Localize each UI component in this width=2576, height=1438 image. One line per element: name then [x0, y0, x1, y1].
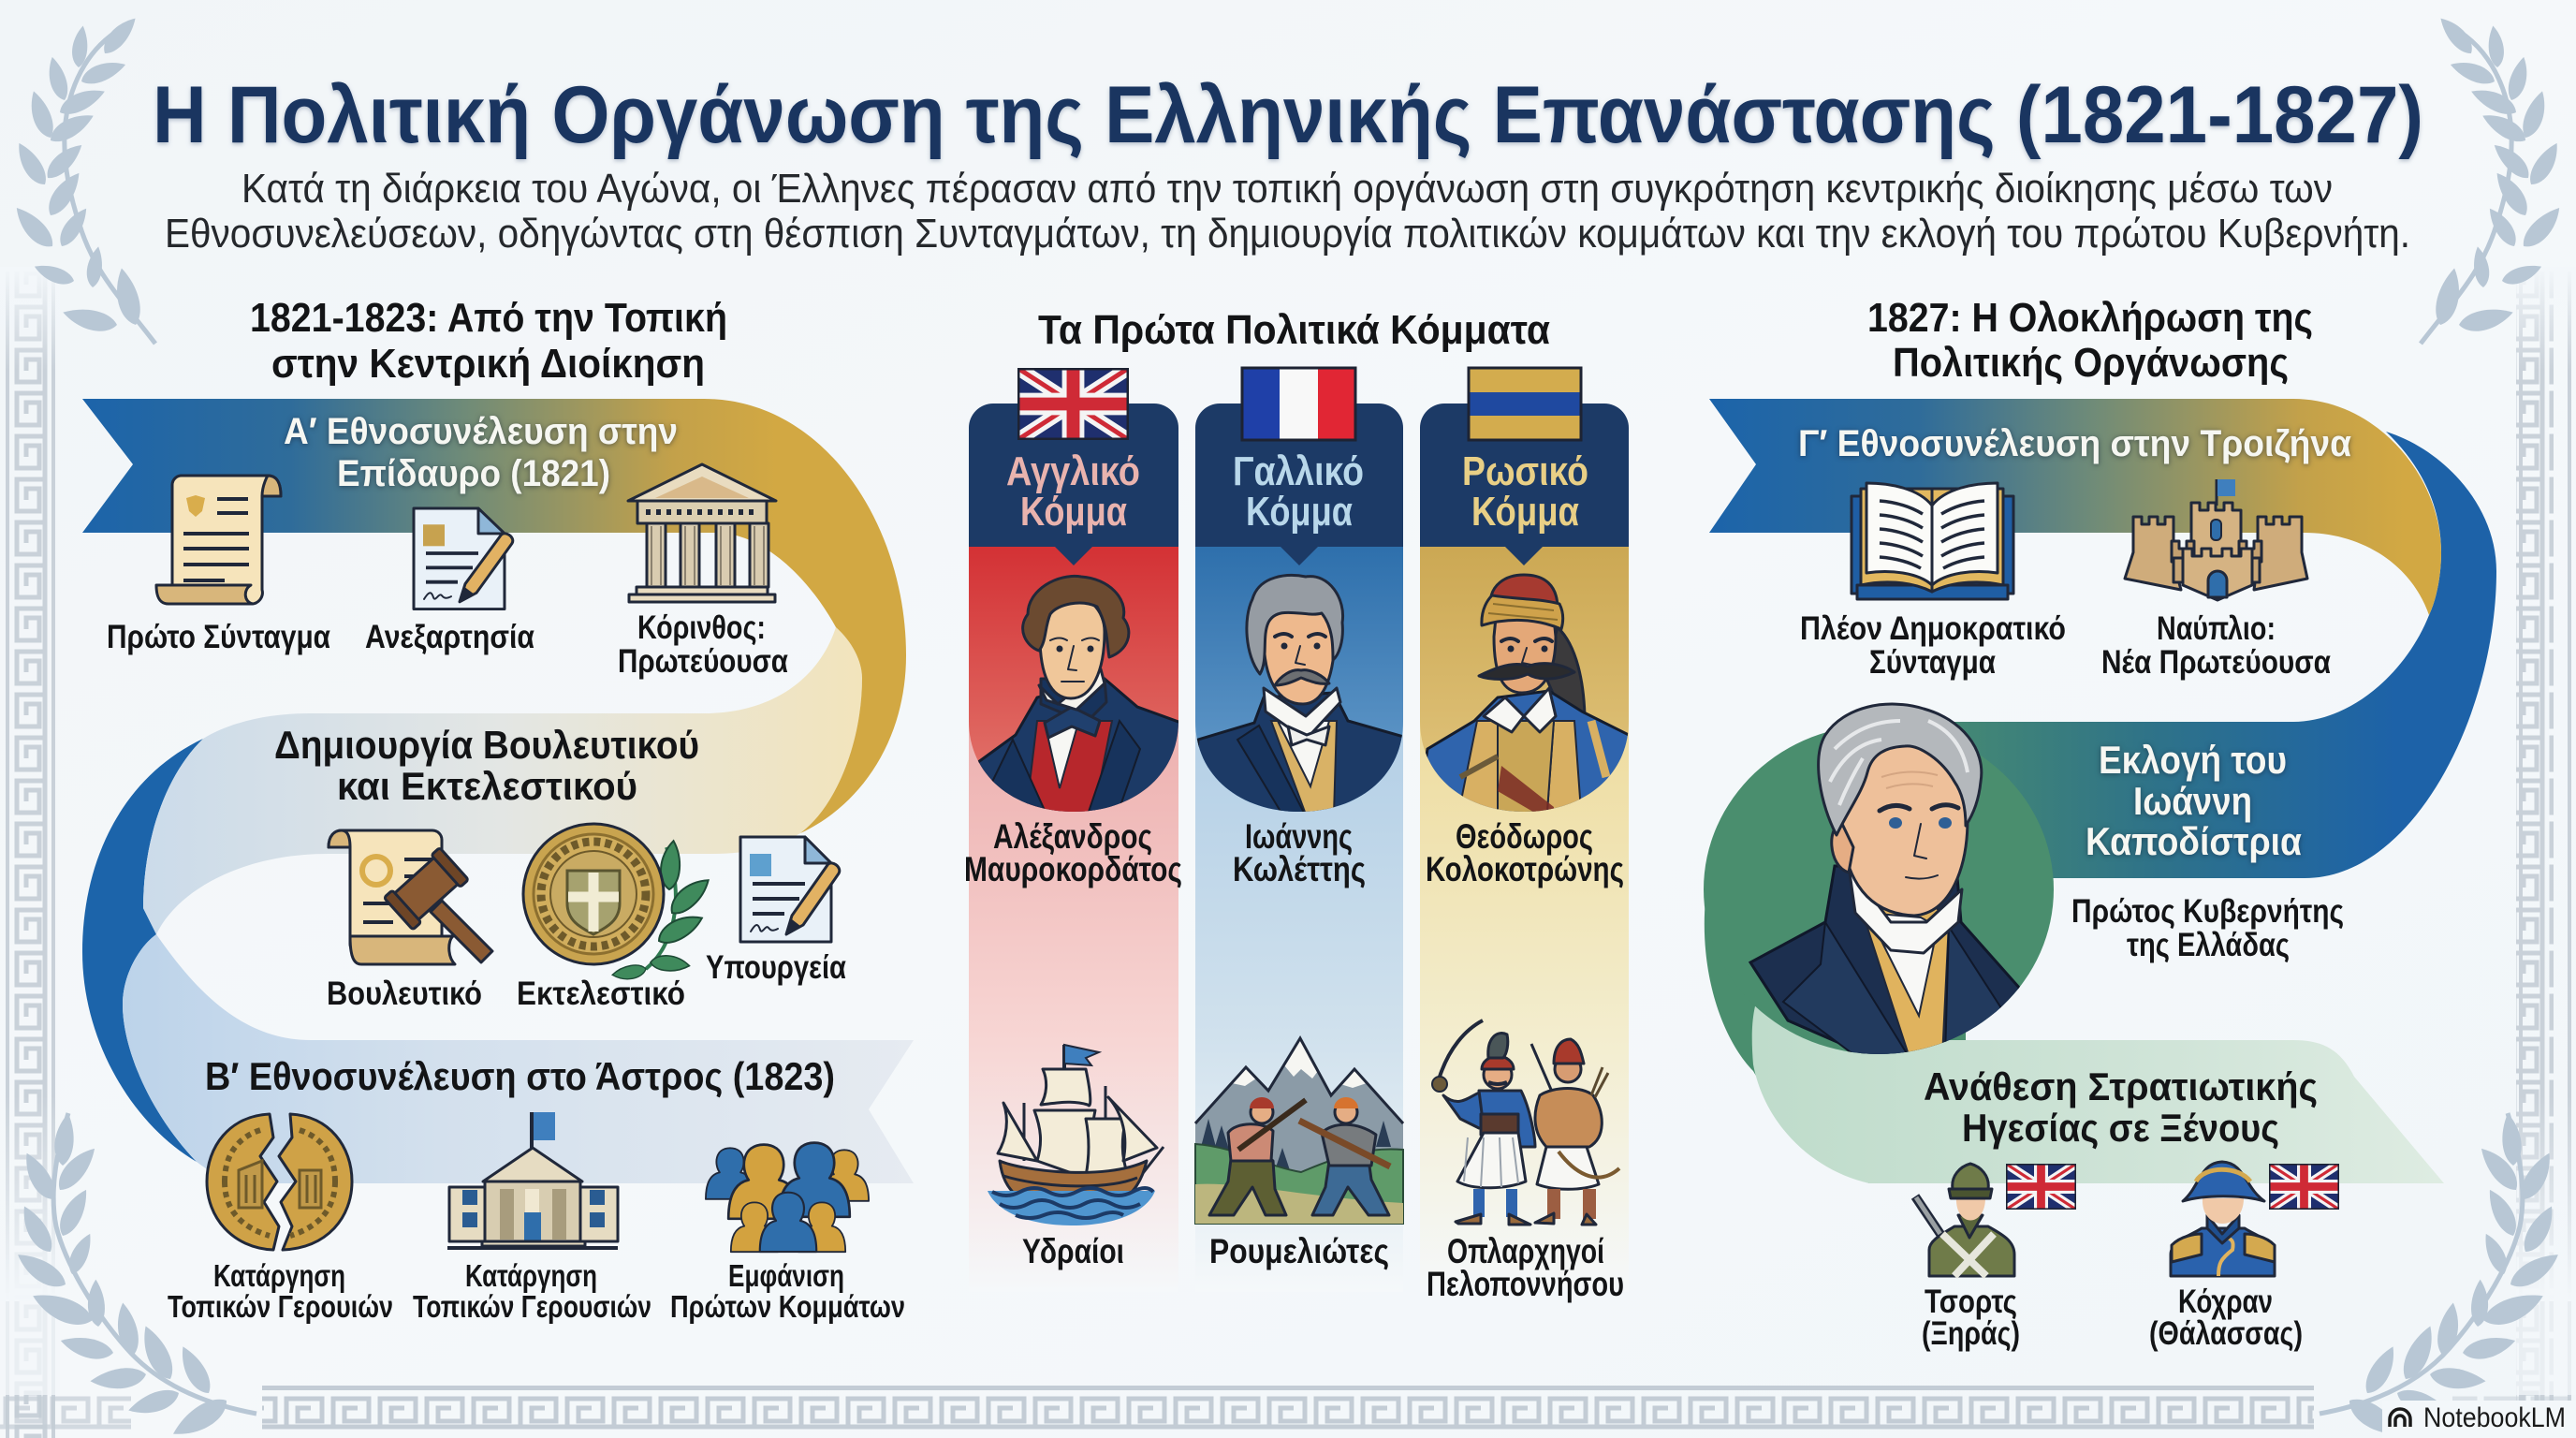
label: election of Kapodistrias: Ιωάννη [2133, 779, 2252, 823]
ribbon text: first assembly: Επίδαυρο (1821) [337, 453, 610, 494]
person name: Κολοκοτρώνης [1426, 850, 1624, 888]
person name [964, 817, 1182, 888]
laurel: bottom left [12, 1112, 256, 1438]
party name: Ρωσικό [1462, 448, 1588, 494]
heading: legislative and executive: Δημιουργία Βουλευτικού [274, 723, 699, 767]
column: French party [1189, 368, 1413, 1292]
heading: 1827: 1827: Η Ολοκλήρωση της [1867, 295, 2313, 341]
label: election of Kapodistrias [2086, 738, 2302, 863]
column: Russian party [1413, 368, 1638, 1303]
heading: 1821-1823: στην Κεντρική Διοίκηση [271, 341, 705, 387]
label: legislative: Βουλευτικό [327, 976, 482, 1012]
portrait: Kolokotronis [1425, 573, 1629, 812]
ribbon: pale band 3 [123, 934, 914, 1183]
icon: broken coin [207, 1114, 352, 1250]
panel: 1827 right timeline [1704, 295, 2496, 1352]
icon: open book [1852, 483, 2013, 599]
label: Corinth capital [618, 609, 788, 680]
ribbon: third assembly [1709, 399, 2441, 615]
label: abolition 2 [413, 1258, 651, 1324]
label: first constitution: Πρώτο Σύνταγμα [107, 619, 330, 655]
party name: Αγγλικό [1006, 448, 1140, 494]
label: democratic constitution [1800, 610, 2066, 681]
party name: Κόμμα [1020, 489, 1127, 535]
label: election of Kapodistrias: Καποδίστρια [2086, 819, 2302, 863]
label: Corinth capital: Πρωτεύουσα [618, 643, 788, 680]
label: Church: (Ξηράς) [1922, 1315, 2020, 1352]
person name: Κωλέττης [1233, 850, 1366, 888]
party name: Κόμμα [1246, 489, 1353, 535]
icon: Nafplio castle [2125, 479, 2307, 600]
icon: signed document [414, 508, 513, 609]
label: first parties: Πρώτων Κομμάτων [670, 1289, 905, 1324]
label: abolition 2: Κατάργηση [465, 1258, 597, 1293]
portrait: Kolettis [1196, 573, 1402, 812]
intro text [165, 166, 2410, 257]
label: Cochrane [2149, 1284, 2303, 1352]
label: Cochrane: Κόχραν [2178, 1284, 2273, 1320]
party name [1006, 448, 1140, 535]
panel: first political parties [964, 307, 1638, 1303]
intro text: Κατά τη διάρκεια του Αγώνα, οι Έλληνες πέρασαν από την τοπική οργάνωση στη συγκρότηση κεντρικής διοίκησης μέσω των [242, 166, 2333, 212]
laurel: top right [2421, 12, 2567, 344]
label: abolition 2: Τοπικών Γερουσιών [413, 1289, 651, 1324]
ribbon text: first assembly [284, 411, 678, 494]
heading: military leadership: Ανάθεση Στρατιωτικής [1924, 1064, 2318, 1108]
icon: scroll and gavel [329, 830, 492, 964]
label: abolition 1: Τοπικών Γερουιών [168, 1289, 393, 1324]
label: independence: Ανεξαρτησία [365, 619, 534, 655]
heading: military leadership: Ηγεσίας σε Ξένους [1962, 1106, 2279, 1150]
icon: government building [447, 1112, 618, 1250]
laurel: top left [9, 12, 155, 344]
label: ministries: Υπουργεία [706, 949, 846, 986]
label: election of Kapodistrias: Εκλογή του [2099, 738, 2287, 782]
ribbon: blue-green band [1919, 432, 2496, 878]
label: Peloponnese chieftains: Πελοποννήσου [1427, 1265, 1624, 1303]
icon: soldier Church [1915, 1164, 2014, 1276]
flag: UK [1017, 368, 1129, 440]
icon: Peloponnese chieftains [1432, 1020, 1619, 1225]
label: Church: Τσορτς [1925, 1284, 2017, 1320]
person name: Μαυροκορδάτος [964, 850, 1182, 888]
heading: legislative and executive: και Εκτελεστικού [337, 764, 637, 808]
party name [1462, 448, 1588, 535]
icon: mountains and fighters [1195, 1038, 1403, 1224]
green crescent [1705, 843, 1966, 1183]
ribbon: pale band 2 [143, 627, 862, 934]
heading: 1821-1823 [250, 295, 727, 387]
label: Cochrane: (Θάλασσας) [2149, 1315, 2303, 1352]
label: Nafplio capital: Ναύπλιο: [2157, 610, 2276, 647]
icon: executive seal [523, 824, 714, 982]
label: first parties: Εμφάνιση [728, 1258, 844, 1293]
label: Church [1922, 1284, 2020, 1352]
label: first parties [670, 1258, 905, 1324]
label: Nafplio capital: Νέα Πρωτεύουσα [2101, 644, 2331, 681]
person name: Αλέξανδρος [993, 817, 1152, 856]
title: Η Πολιτική Οργάνωση της Ελληνικής Επανάστασης (1821-1827) [153, 70, 2423, 160]
person name [1233, 817, 1366, 888]
ribbon: pale green leadership [1752, 988, 2444, 1183]
flag: UK (Cochrane) [2269, 1164, 2339, 1210]
heading: 1827: Πολιτικής Οργάνωσης [1893, 340, 2289, 386]
label: democratic constitution: Σύνταγμα [1869, 644, 1996, 681]
heading: second assembly: Β′ Εθνοσυνέλευση στο Άστρος (1823) [205, 1054, 835, 1098]
portrait: Kapodistrias [1704, 704, 2059, 1058]
person name: Θεόδωρος [1456, 817, 1593, 856]
flag: UK (Church) [2006, 1164, 2076, 1210]
panel: 1821-1823 left timeline [82, 295, 914, 1324]
party name: Γαλλικό [1233, 448, 1364, 494]
heading: parties: Τα Πρώτα Πολιτικά Κόμματα [1038, 307, 1550, 353]
label: abolition 1 [168, 1258, 393, 1324]
ribbon: first assembly [82, 399, 906, 833]
person name: Ιωάννης [1245, 817, 1353, 856]
icon: scroll constitution [156, 476, 281, 604]
label: Peloponnese chieftains [1427, 1232, 1624, 1303]
label: executive: Εκτελεστικό [517, 976, 685, 1012]
icon: ministries document [740, 837, 840, 942]
portrait: Mavrokordatos [977, 575, 1178, 812]
intro text: Εθνοσυνελεύσεων, οδηγώντας στη θέσπιση Συνταγμάτων, τη δημιουργία πολιτικών κομμάτων και την εκλογή του πρώτου Κυβερνήτη. [165, 211, 2410, 257]
ribbon text: first assembly: Α′ Εθνοσυνέλευση στην [284, 411, 678, 452]
icon: admiral Cochrane [2171, 1162, 2275, 1276]
person name [1426, 817, 1624, 888]
label: Peloponnese chieftains: Οπλαρχηγοί [1447, 1232, 1604, 1270]
column: English party [964, 368, 1189, 1292]
flag: France [1242, 368, 1355, 440]
heading: 1821-1823: 1821-1823: Από την Τοπική [250, 295, 727, 341]
laurel: bottom right [2320, 1112, 2564, 1438]
label: first governor: Πρώτος Κυβερνήτης [2071, 893, 2344, 930]
watermark: NotebookLM [2382, 1401, 2576, 1438]
label: first governor [2071, 893, 2344, 963]
ribbon text: third assembly: Γ′ Εθνοσυνέλευση στην Τροιζήνα [1798, 423, 2351, 464]
label: first governor: της Ελλάδας [2127, 927, 2290, 963]
flag: Russian party stripes [1469, 368, 1581, 440]
label: Nafplio capital [2101, 610, 2331, 681]
icon: group of people [706, 1143, 869, 1252]
icon: temple of Corinth [628, 464, 776, 602]
ribbon: blue crescent [82, 739, 203, 1162]
label: abolition 1: Κατάργηση [213, 1258, 345, 1293]
icon: ship [988, 1045, 1164, 1225]
label: Hydriots: Υδραίοι [1022, 1232, 1124, 1270]
heading: military leadership [1924, 1064, 2318, 1150]
heading: 1827 [1867, 295, 2313, 386]
label: Roumeliotes: Ρουμελιώτες [1209, 1232, 1389, 1270]
party name [1233, 448, 1364, 535]
party name: Κόμμα [1471, 489, 1579, 535]
label: Corinth capital: Κόρινθος: [637, 609, 766, 646]
heading: legislative and executive [274, 723, 699, 808]
label: democratic constitution: Πλέον Δημοκρατικό [1800, 610, 2066, 647]
